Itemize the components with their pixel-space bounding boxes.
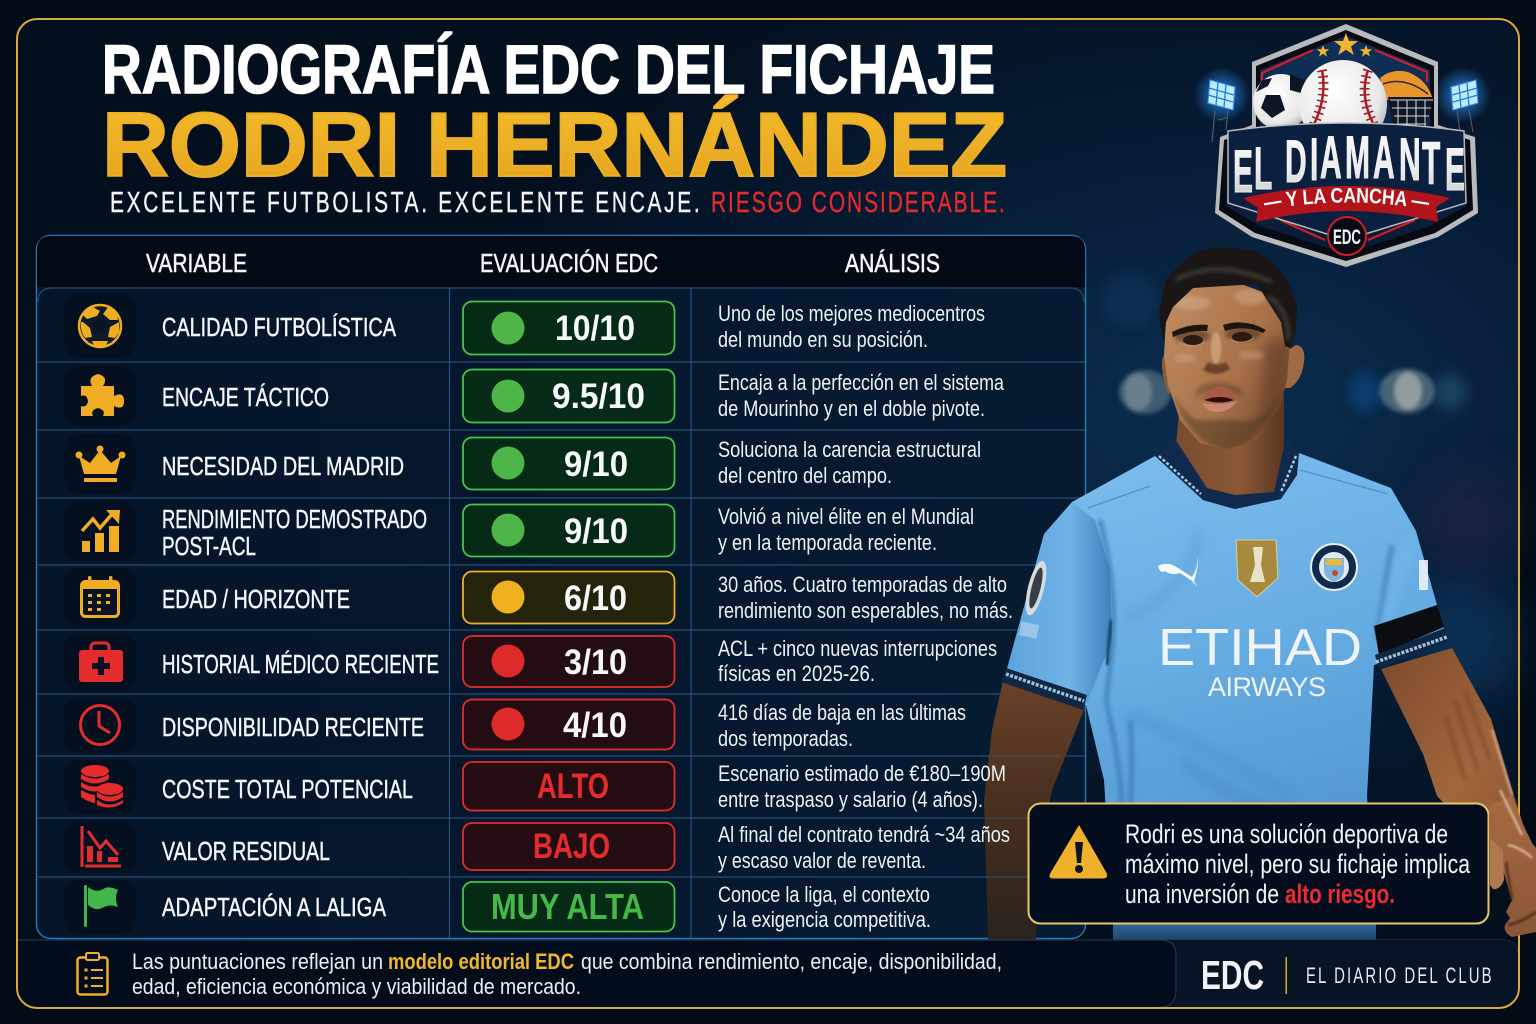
row: encaje táctico: ENCAJE TÁCTICO [162,382,329,412]
stars [1317,33,1372,57]
score pill: 9.5/10 [552,377,645,416]
row: necesidad del madrid: NECESIDAD DEL MADRID [162,451,404,481]
row: adaptación a laliga [64,880,931,934]
row: calidad futbolística [64,293,985,358]
row: calidad futbolística: del mundo en su posición. [718,327,928,352]
callout [1028,804,1488,924]
row: rendimiento demostrado: RENDIMIENTO DEMOSTRADO [162,504,427,534]
icon: clock [64,697,136,753]
sponsor: ETIHAD AIRWAYS [1158,619,1362,702]
score pill [463,700,674,750]
collar [1155,442,1299,509]
row: disponibilidad: 416 días de baja en las últimas [718,700,966,725]
score pill [463,302,674,354]
title: RADIOGRAFÍA EDC DEL FICHAJE [102,31,995,108]
icon: soccer ball [64,293,136,358]
floodlights [1194,67,1491,142]
shield [1215,24,1478,267]
row: encaje táctico: de Mourinho y en el doble pivote. [718,396,985,421]
hair [1159,247,1297,348]
row: edad / horizonte: rendimiento son esperables, no más. [718,598,1013,623]
callout: una inversión de [1125,879,1279,909]
row: calidad futbolística: Uno de los mejores mediocentros [718,301,985,326]
rating pill [463,823,674,870]
face [1164,278,1290,450]
shirt lower fade [1113,924,1376,940]
subtitle: RIESGO CONSIDERABLE. [711,187,1005,219]
right sleeve print [1419,560,1428,590]
footer bar: Las puntuaciones reflejan un [132,949,383,974]
row: disponibilidad: dos temporadas. [718,726,853,751]
eye sockets [1174,329,1210,343]
row: coste total: Escenario estimado de €180–190M [718,761,1006,786]
score pill: 4/10 [563,706,627,745]
hand over frame [1489,790,1536,937]
row: valor residual: VALOR RESIDUAL [162,836,330,866]
head [1159,247,1304,450]
icon: puzzle [64,366,136,426]
EDC seal [1328,217,1366,255]
shirt body [1005,453,1448,925]
rating pill [463,762,674,810]
icon: warning [1050,826,1107,878]
title: RODRI HERNÁNDEZ [102,95,1007,196]
score pill [463,636,674,687]
player: Rodri [984,247,1525,940]
callout: Rodri es una solución deportiva de [1125,819,1448,849]
table panel [36,236,1086,938]
score pill: 10/10 [555,309,635,348]
highlights [1174,296,1210,310]
baseball [1300,60,1387,124]
row: coste total [64,760,1006,814]
eyebrows [1172,325,1208,337]
table header [146,248,940,278]
red accent lines [1262,50,1427,240]
row: coste total: entre traspaso y salario (4 años). [718,787,983,812]
sponsor: ETIHAD AIRWAYS: AIRWAYS [1208,672,1326,702]
row: rendimiento demostrado [64,501,974,561]
table header: EVALUACIÓN EDC [480,248,658,278]
row: necesidad del madrid [64,434,981,494]
row: edad / horizonte [64,568,1013,626]
footer bar: edad, eficiencia económica y viabilidad de mercado. [132,974,581,999]
left sleeve cuff [1001,668,1087,710]
balls [1253,60,1433,126]
row: necesidad del madrid: del centro del campo. [718,463,892,488]
ears [1282,345,1304,388]
row: rendimiento demostrado: Volvió a nivel élite en el Mundial [718,504,974,529]
logo: El Diamante y la Cancha [1196,24,1490,267]
row: encaje táctico [64,366,1005,426]
row: valor residual: Al final del contrato tendrá ~34 años [718,822,1010,847]
footer bar [17,940,1518,1007]
icon: medical kit [64,633,136,691]
neck [1176,395,1284,505]
row: historial médico: físicas en 2025-26. [718,661,875,686]
rating pill [463,882,674,932]
mouth [1200,387,1237,400]
row: historial médico: HISTORIAL MÉDICO RECIENTE [162,649,439,679]
score pill [463,438,674,490]
table header: ANÁLISIS [845,248,940,278]
stubble and shading [1173,396,1272,450]
eyes [1183,335,1203,345]
table lines over arm [985,756,1060,877]
puma logo [1158,556,1198,587]
soccer ball [1253,74,1306,126]
row: necesidad del madrid: Soluciona la carencia estructural [718,437,981,462]
icon: coins [64,760,136,814]
right arm [1381,648,1525,850]
row: adaptación a laliga: y la exigencia competitiva. [718,907,931,932]
wordmark: EL DIAMANTE [1233,125,1465,206]
row: disponibilidad: DISPONIBILIDAD RECIENTE [162,712,424,742]
subtitle [110,187,1005,219]
footer bar: modelo editorial EDC [388,949,574,974]
callout: alto riesgo. [1285,879,1395,909]
red ribbon [1243,186,1450,222]
gold badge [1236,540,1278,597]
icon: falling chart [64,821,136,873]
row: valor residual [64,821,1010,873]
rating pill: ALTO [537,767,609,806]
icon: calendar [64,568,136,626]
left sleeve patches [1021,559,1051,617]
score pill [463,572,674,624]
EDC seal: EDC [1333,226,1361,249]
row: disponibilidad [64,697,966,753]
row: rendimiento demostrado: y en la temporada reciente. [718,530,937,555]
row: adaptación a laliga: Conoce la liga, el contexto [718,882,930,907]
row: adaptación a laliga: ADAPTACIÓN A LALIGA [162,892,387,922]
icon: crown [64,434,136,494]
rating pill: MUY ALTA [491,886,644,927]
ribbon text: — Y LA CANCHA — [1264,188,1430,206]
row: historial médico [64,633,997,691]
row: encaje táctico: Encaja a la perfección en el sistema [718,370,1005,395]
banner shape [1228,123,1466,240]
row: coste total: COSTE TOTAL POTENCIAL [162,774,413,804]
footer bar: que combina rendimiento, encaje, disponibilidad, [581,949,1002,974]
brand EDC: EL DIARIO DEL CLUB [1306,963,1492,988]
row: historial médico: ACL + cinco nuevas interrupciones [718,636,997,661]
club crest [1311,544,1357,590]
row: calidad futbolística: CALIDAD FUTBOLÍSTICA [162,312,396,342]
sleeve and folds [1005,470,1410,860]
title [102,31,1007,196]
brand EDC [1201,952,1492,998]
basketball and net [1380,71,1433,132]
icon: clipboard [78,953,108,994]
table header: VARIABLE [146,248,247,278]
icon: flag [64,880,136,934]
left arm [984,680,1085,940]
armband [1374,605,1444,655]
brand EDC: EDC [1201,952,1264,998]
score pill: 6/10 [564,579,627,618]
score pill [463,370,674,422]
score pill [463,504,674,556]
subtitle: EXCELENTE FUTBOLISTA. EXCELENTE ENCAJE. [110,187,700,219]
row: rendimiento demostrado: POST-ACL [162,531,256,561]
icon: rising chart [64,501,136,561]
score pill: 9/10 [564,512,628,551]
sponsor: ETIHAD AIRWAYS: ETIHAD [1158,619,1362,677]
score pill: 3/10 [564,643,627,682]
rating pill: BAJO [533,827,610,866]
row: edad / horizonte: 30 años. Cuatro temporadas de alto [718,572,1007,597]
score pill: 9/10 [564,445,628,484]
row: edad / horizonte: EDAD / HORIZONTE [162,584,350,614]
nose [1203,362,1230,374]
row: valor residual: y escaso valor de reventa. [718,848,926,873]
